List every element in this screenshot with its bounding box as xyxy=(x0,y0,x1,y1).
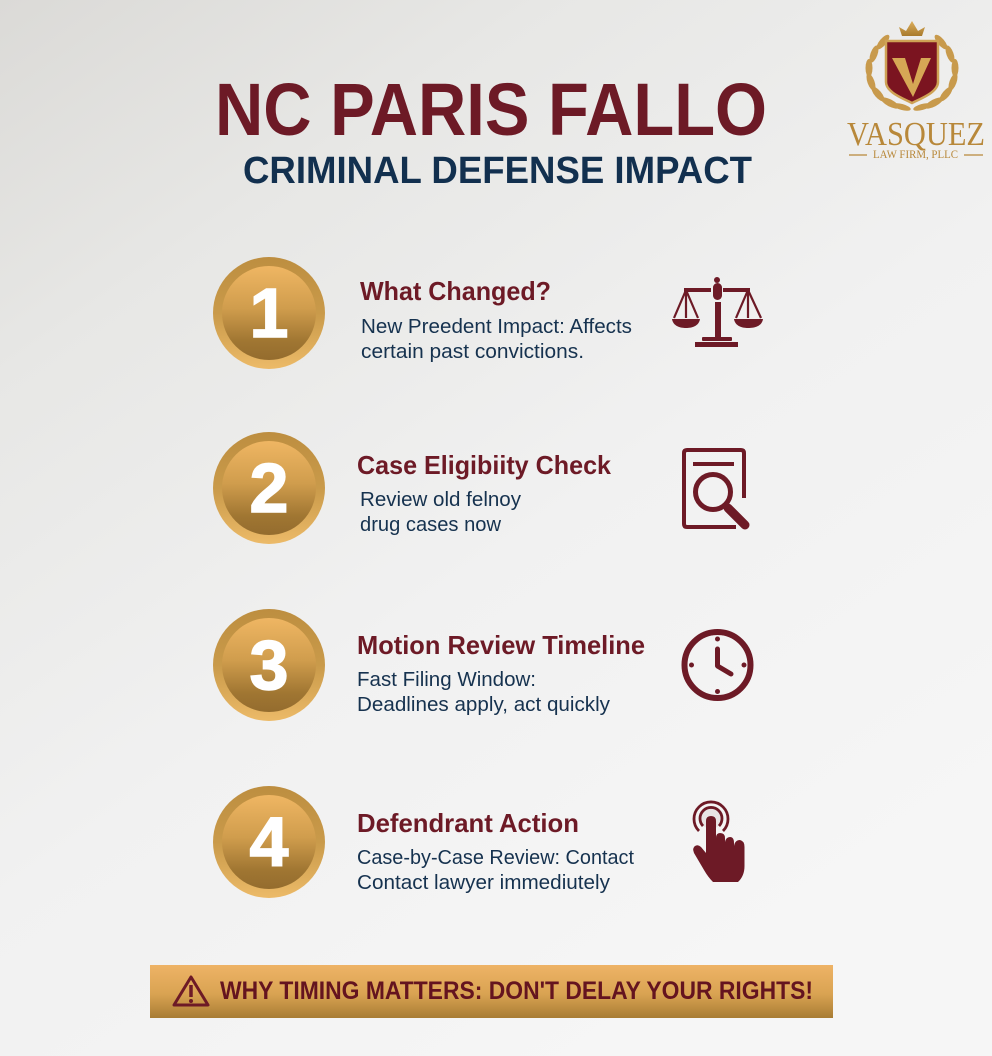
number badge 2: 2 xyxy=(250,449,288,527)
number badge 3 xyxy=(213,609,325,721)
icon: document with magnifier xyxy=(684,450,745,527)
body text 3 xyxy=(357,669,610,716)
number badge 4 xyxy=(213,786,325,898)
banner: why timing matters xyxy=(150,965,833,1018)
subtitle: CRIMINAL DEFENSE IMPACT xyxy=(243,150,752,192)
number badge 1 xyxy=(213,257,325,369)
heading 4: Defendrant Action xyxy=(357,808,579,838)
logo: Vasquez Law Firm xyxy=(847,21,985,161)
body text 4: Contact lawyer immediutely xyxy=(357,872,610,894)
logo tagline: LAW FIRM, PLLC xyxy=(873,149,958,161)
heading 2: Case Eligibiity Check xyxy=(357,450,612,480)
step 2 xyxy=(213,432,745,544)
body text 1: New Preedent Impact: Affects xyxy=(361,316,632,338)
body text 2 xyxy=(360,489,521,536)
step 4 xyxy=(213,786,744,898)
icon: warning triangle xyxy=(174,977,208,1005)
body text 4 xyxy=(357,847,634,894)
body text 3: Deadlines apply, act quickly xyxy=(357,694,610,716)
body text 1: certain past convictions. xyxy=(361,341,584,363)
body text 2: drug cases now xyxy=(360,514,502,536)
banner text: WHY TIMING MATTERS: DON'T DELAY YOUR RIGHTS! xyxy=(220,977,813,1005)
number badge 2 xyxy=(213,432,325,544)
step 1 xyxy=(213,257,763,369)
heading 3: Motion Review Timeline xyxy=(357,630,645,660)
logo shield xyxy=(886,41,938,103)
icon: scales of justice xyxy=(672,277,763,347)
body text 2: Review old felnoy xyxy=(360,489,521,511)
logo laurel wreath xyxy=(865,33,959,112)
heading 1: What Changed? xyxy=(360,276,551,306)
logo crown xyxy=(899,21,925,36)
number badge 4: 4 xyxy=(250,803,289,881)
icon: clock xyxy=(684,632,750,698)
body text 4: Case-by-Case Review: Contact xyxy=(357,847,634,869)
body text 3: Fast Filing Window: xyxy=(357,669,536,691)
step 3 xyxy=(213,609,750,721)
icon: pointing hand with touch rings xyxy=(693,802,744,882)
number badge 1: 1 xyxy=(250,274,288,352)
body text 1 xyxy=(361,316,632,363)
logo V mark xyxy=(892,58,931,97)
title: NC PARIS FALLO xyxy=(215,68,767,151)
number badge 3: 3 xyxy=(250,626,288,704)
